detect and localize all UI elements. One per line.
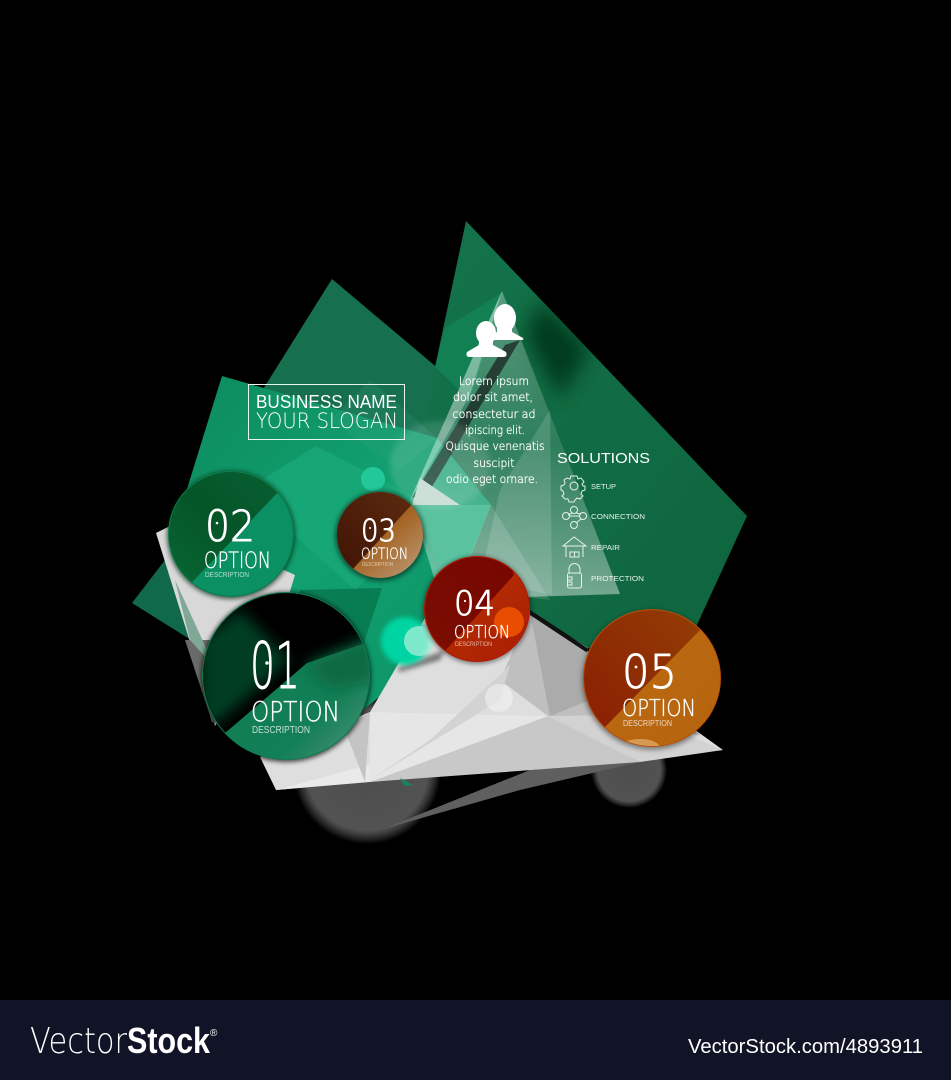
text block: lorem ipsum: odio eget ornare. bbox=[446, 472, 538, 486]
panel: right dark green diamond bbox=[435, 221, 747, 648]
option 03: DESCRIPTION bbox=[362, 562, 393, 568]
image id: VectorStock.com/4893911 bbox=[688, 1036, 923, 1058]
option 01: OPTION bbox=[251, 695, 340, 728]
option 02: 02 bbox=[205, 502, 255, 552]
option 03: 03 bbox=[361, 514, 396, 549]
label: setup: SETUP bbox=[591, 482, 616, 491]
option 02 bbox=[164, 468, 298, 602]
option 03 bbox=[330, 480, 430, 581]
title box: BUSINESS NAME bbox=[256, 391, 397, 412]
icon: connection bbox=[562, 506, 586, 528]
icon: gear bbox=[561, 476, 585, 502]
infographic canvas bbox=[0, 221, 951, 1080]
text block: lorem ipsum: consectetur ad bbox=[452, 407, 536, 421]
text block: lorem ipsum: Quisque venenatis bbox=[446, 439, 545, 453]
option 01 bbox=[200, 590, 375, 765]
option 04: 04 bbox=[454, 584, 495, 624]
heading: solutions: SOLUTIONS bbox=[557, 450, 650, 467]
logo: VectorStock: VectorStock bbox=[30, 1020, 211, 1062]
panel: white faceted shapes bbox=[156, 522, 723, 790]
footer bar bbox=[0, 1000, 951, 1080]
option 02: DESCRIPTION bbox=[205, 570, 249, 579]
icon: house bbox=[563, 537, 586, 557]
logo: registered mark: ® bbox=[210, 1028, 218, 1039]
solutions list bbox=[557, 450, 650, 588]
icon: padlock bbox=[567, 564, 582, 588]
option 04: DESCRIPTION bbox=[455, 641, 492, 648]
panel: bright green square bbox=[132, 376, 491, 710]
grey bokeh circles under the shapes bbox=[293, 696, 667, 844]
text block: lorem ipsum: suscipit bbox=[474, 456, 514, 470]
option 01: DESCRIPTION bbox=[252, 725, 310, 736]
option 03: OPTION bbox=[361, 544, 408, 563]
option 01: 01 bbox=[250, 630, 300, 704]
label: repair: REPAIR bbox=[591, 543, 621, 552]
title box bbox=[248, 384, 404, 440]
label: connection: CONNECTION bbox=[591, 512, 645, 521]
icon: two people bbox=[466, 304, 523, 357]
text block: lorem ipsum: dolor sit amet, bbox=[453, 390, 533, 404]
option 05: OPTION bbox=[622, 696, 696, 722]
panel: back-left dark green square bbox=[250, 279, 455, 460]
option 05: DESCRIPTION bbox=[623, 719, 672, 728]
option 04 bbox=[420, 550, 535, 665]
text block: lorem ipsum bbox=[446, 374, 545, 486]
text block: lorem ipsum: Lorem ipsum bbox=[459, 374, 529, 388]
title box: YOUR SLOGAN bbox=[256, 409, 398, 433]
label: protection: PROTECTION bbox=[591, 574, 644, 583]
option 02: OPTION bbox=[204, 549, 271, 574]
option 05 bbox=[580, 600, 725, 757]
option 04: OPTION bbox=[454, 622, 510, 643]
option 05: 05 bbox=[622, 645, 677, 699]
panel: central glass triangles bbox=[390, 291, 620, 600]
panel: turquoise bokeh lights bbox=[361, 467, 434, 665]
text block: lorem ipsum: ipiscing elit. bbox=[465, 423, 525, 437]
